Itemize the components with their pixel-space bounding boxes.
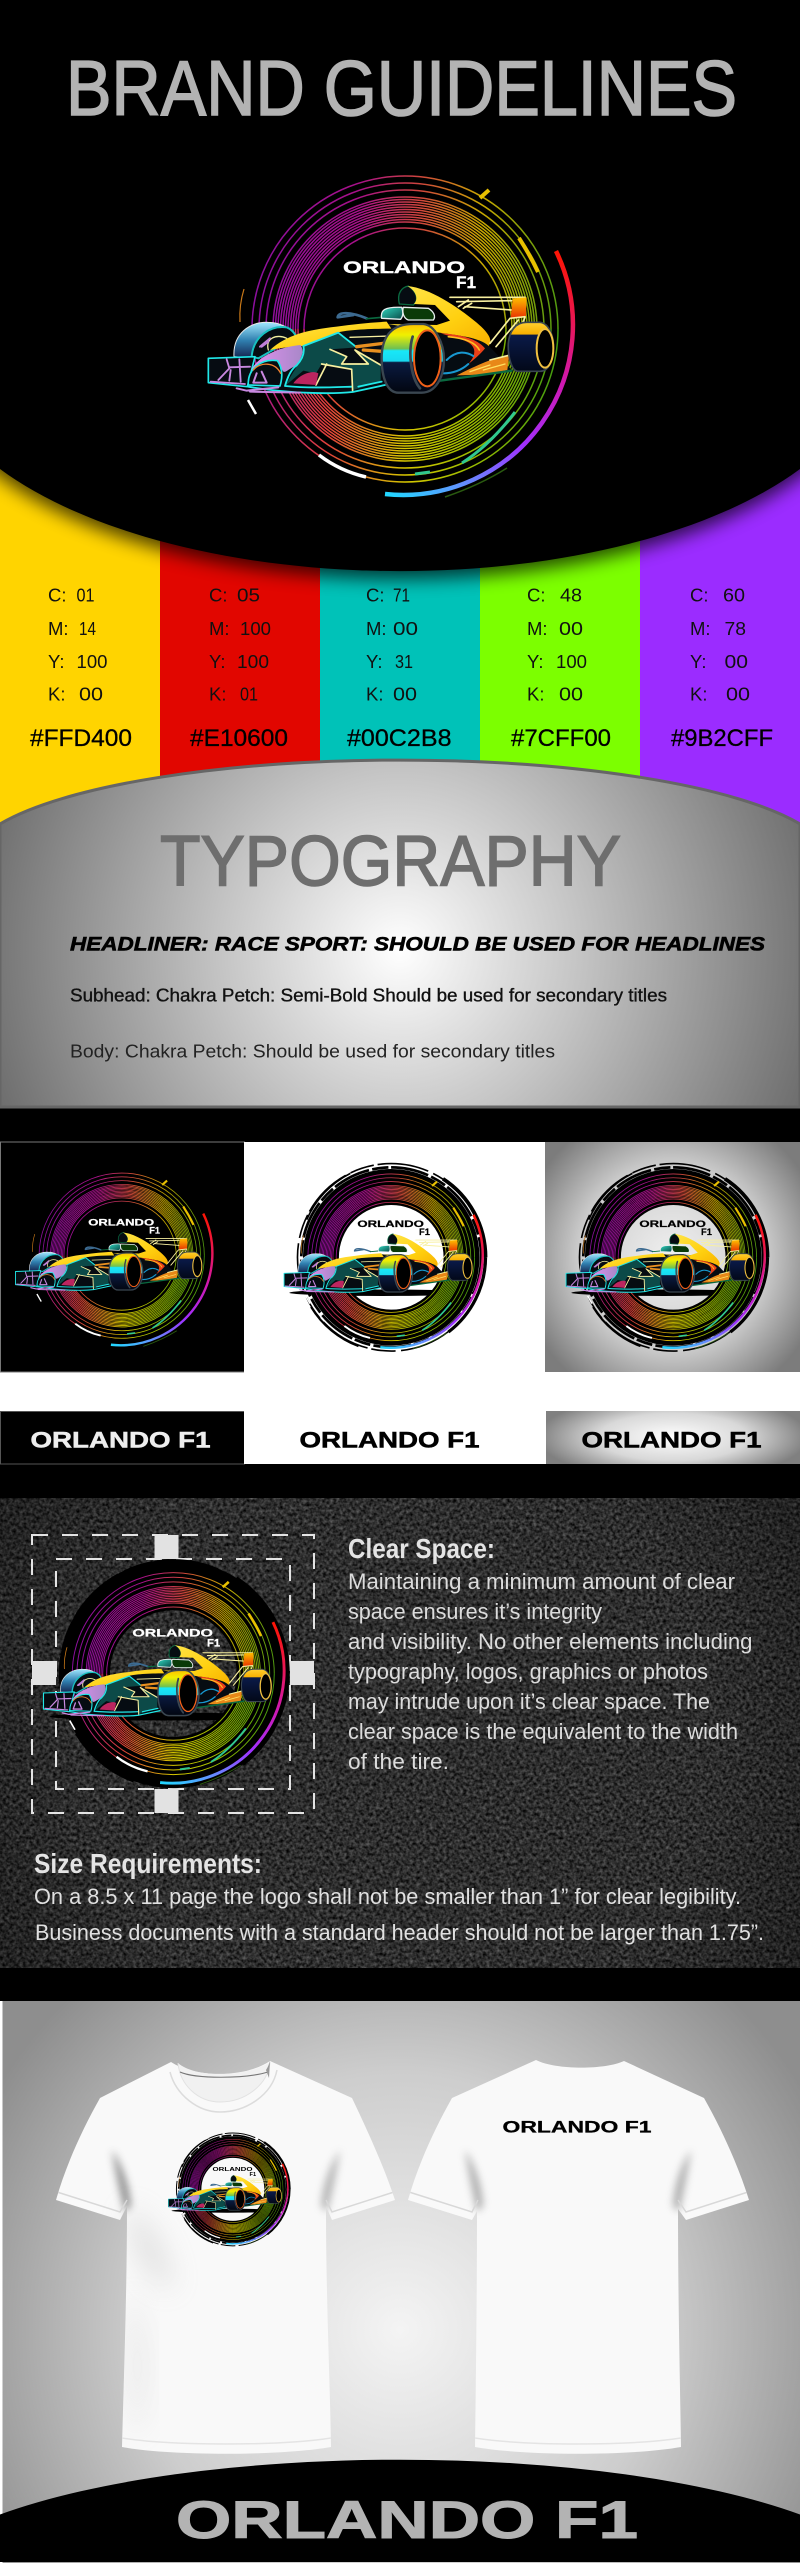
size requirements heading: Size Requirements: bbox=[34, 1848, 262, 1879]
colour specs: red: 100 bbox=[237, 651, 269, 672]
t-shirt: front bbox=[56, 2061, 395, 2454]
colour specs: yellow: K: bbox=[48, 684, 65, 704]
front collar bbox=[170, 2061, 277, 2112]
panel: logo on white: F1 bbox=[419, 1227, 430, 1237]
panel: clear space texture bbox=[0, 1498, 800, 1968]
colour specs: teal: 31 bbox=[395, 651, 413, 672]
wordmark on black: ORLANDO F1 bbox=[30, 1428, 210, 1452]
colour specs: yellow bbox=[30, 584, 132, 752]
panel: logo on white bbox=[244, 1142, 546, 1464]
clear space body: Maintaining a minimum amount of clear bbox=[348, 1569, 735, 1594]
colour specs: teal bbox=[347, 584, 452, 752]
typography heading: TYPOGRAPHY bbox=[160, 822, 621, 902]
colour specs: red: K: bbox=[209, 684, 226, 704]
colour specs: green: 00 bbox=[559, 618, 583, 639]
size requirements body bbox=[34, 1884, 764, 1945]
clear space body bbox=[348, 1569, 752, 1774]
colour specs: purple: 78 bbox=[724, 618, 746, 639]
colour specs: green: K: bbox=[527, 684, 544, 704]
front print logo: F1 bbox=[250, 2172, 256, 2178]
clear space heading: Clear Space: bbox=[348, 1533, 495, 1564]
logo with clear space: F1 bbox=[207, 1638, 220, 1650]
colour specs: purple: #9B2CFF bbox=[671, 725, 773, 752]
colour specs: green bbox=[511, 584, 611, 752]
panel: t-shirt mockups background bbox=[0, 2001, 800, 2563]
hero logo: ORLANDO bbox=[343, 259, 465, 277]
colour specs: yellow: 100 bbox=[76, 651, 108, 672]
colour specs: red: 05 bbox=[237, 584, 260, 606]
clear space body: clear space is the equivalent to the width bbox=[348, 1719, 738, 1744]
hero logo bbox=[208, 176, 573, 497]
colour specs: red: Y: bbox=[209, 651, 225, 672]
colour specs: yellow: 00 bbox=[79, 684, 103, 704]
subhead specimen: Subhead: Chakra Petch: Semi-Bold Should be used for secondary titles bbox=[70, 986, 667, 1006]
colour specs: teal: Y: bbox=[366, 651, 382, 672]
swatch: purple bbox=[640, 440, 800, 860]
hero logo: F1 bbox=[456, 274, 476, 292]
colour specs: teal: #00C2B8 bbox=[347, 725, 452, 752]
colour specs: teal: K: bbox=[366, 684, 383, 704]
clear-space marker: top bbox=[154, 1535, 178, 1559]
body specimen: Body: Chakra Petch: Should be used for secondary titles bbox=[70, 1042, 555, 1062]
headliner specimen: HEADLINER: RACE SPORT: SHOULD BE USED FOR HEADLINES bbox=[70, 934, 765, 956]
colour specs: green: C: bbox=[527, 584, 546, 606]
swatch: red bbox=[160, 440, 320, 860]
back print wordmark: ORLANDO F1 bbox=[502, 2118, 652, 2136]
logo with clear space bbox=[43, 1560, 287, 1787]
clear space body: typography, logos, graphics or photos bbox=[348, 1659, 708, 1684]
colour specs: purple: K: bbox=[690, 684, 707, 704]
size requirements body: Business documents with a standard header should not be larger than 1.75”. bbox=[35, 1920, 764, 1945]
colour specs: yellow: 01 bbox=[76, 584, 94, 606]
wordmark on white bbox=[244, 1411, 546, 1464]
colour specs: yellow: M: bbox=[48, 618, 69, 639]
panel: logo on grey: ORLANDO bbox=[639, 1219, 706, 1229]
colour specs: teal: 71 bbox=[393, 584, 410, 606]
panel: logo on grey bbox=[545, 1142, 800, 1372]
colour specs: green: M: bbox=[527, 618, 548, 639]
panel: logo on grey: F1 bbox=[701, 1227, 712, 1237]
colour specs: yellow: #FFD400 bbox=[30, 725, 132, 752]
front print logo: ORLANDO bbox=[213, 2167, 253, 2173]
colour specs: yellow: C: bbox=[48, 584, 66, 606]
colour specs: purple: 60 bbox=[723, 584, 745, 606]
wordmark on white: ORLANDO F1 bbox=[300, 1428, 480, 1452]
colour specs: teal: 00 bbox=[393, 618, 418, 639]
colour specs: purple bbox=[671, 584, 773, 752]
clear-space marker: left bbox=[32, 1661, 56, 1685]
wordmark on grey: ORLANDO F1 bbox=[582, 1428, 762, 1452]
wordmark on black bbox=[0, 1412, 244, 1464]
colour specs: teal: M: bbox=[366, 618, 387, 639]
colour specs: purple: 00 bbox=[724, 651, 748, 672]
panel: logo on black: F1 bbox=[149, 1226, 160, 1236]
swatch: yellow bbox=[0, 440, 160, 860]
black header curve bbox=[0, 0, 800, 571]
panel: logo on white: ORLANDO bbox=[357, 1219, 424, 1229]
header shadow bbox=[0, 469, 800, 592]
panel: logo on black: ORLANDO bbox=[88, 1217, 154, 1227]
clear space diagram bbox=[32, 1535, 314, 1813]
colour specs: purple: C: bbox=[690, 584, 708, 606]
colour specs: teal: C: bbox=[366, 584, 384, 606]
clear space body: and visibility. No other elements including bbox=[348, 1629, 752, 1654]
swatch: teal bbox=[320, 440, 480, 860]
colour specs: red: 01 bbox=[240, 684, 258, 704]
colour specs: purple: M: bbox=[690, 618, 711, 639]
clear space body: may intrude upon it’s clear space. The bbox=[348, 1689, 710, 1714]
size requirements body: On a 8.5 x 11 page the logo shall not be smaller than 1” for clear legibility. bbox=[34, 1884, 741, 1909]
front print logo bbox=[168, 2133, 290, 2246]
colour specs: green: #7CFF00 bbox=[511, 725, 611, 752]
colour specs: red: 100 bbox=[240, 618, 271, 639]
colour specs: red bbox=[190, 584, 288, 752]
colour specs: yellow: Y: bbox=[48, 651, 64, 672]
colour stripes panel bbox=[0, 440, 800, 860]
colour specs: purple: 00 bbox=[726, 684, 750, 704]
logo with clear space: ORLANDO bbox=[132, 1628, 213, 1640]
colour specs: green: 100 bbox=[556, 651, 587, 672]
colour specs: red: #E10600 bbox=[190, 725, 288, 752]
colour specs: teal: 00 bbox=[393, 684, 417, 704]
colour specs: red: M: bbox=[209, 618, 230, 639]
white backing band bbox=[0, 1372, 800, 1412]
colour specs: green: 48 bbox=[560, 584, 582, 606]
clear-space marker: right bbox=[290, 1661, 314, 1685]
colour specs: green: Y: bbox=[527, 651, 543, 672]
colour specs: purple: Y: bbox=[690, 651, 706, 672]
colour specs: red: C: bbox=[209, 584, 228, 606]
colour specs: yellow: 14 bbox=[79, 618, 96, 639]
swatch: green bbox=[480, 440, 640, 860]
footer black curve bbox=[0, 2460, 800, 2562]
colour specs: green: 00 bbox=[559, 684, 583, 704]
clear-space marker: bottom bbox=[154, 1789, 178, 1813]
panel: typography bbox=[0, 760, 800, 1107]
wordmark on grey bbox=[546, 1411, 800, 1464]
footer wordmark: ORLANDO F1 bbox=[176, 2491, 638, 2550]
panel: logo on black bbox=[0, 1142, 244, 1372]
clear space body: space ensures it’s integrity bbox=[348, 1599, 602, 1624]
t-shirt: back bbox=[408, 2060, 749, 2454]
clear space body: of the tire. bbox=[348, 1749, 449, 1774]
